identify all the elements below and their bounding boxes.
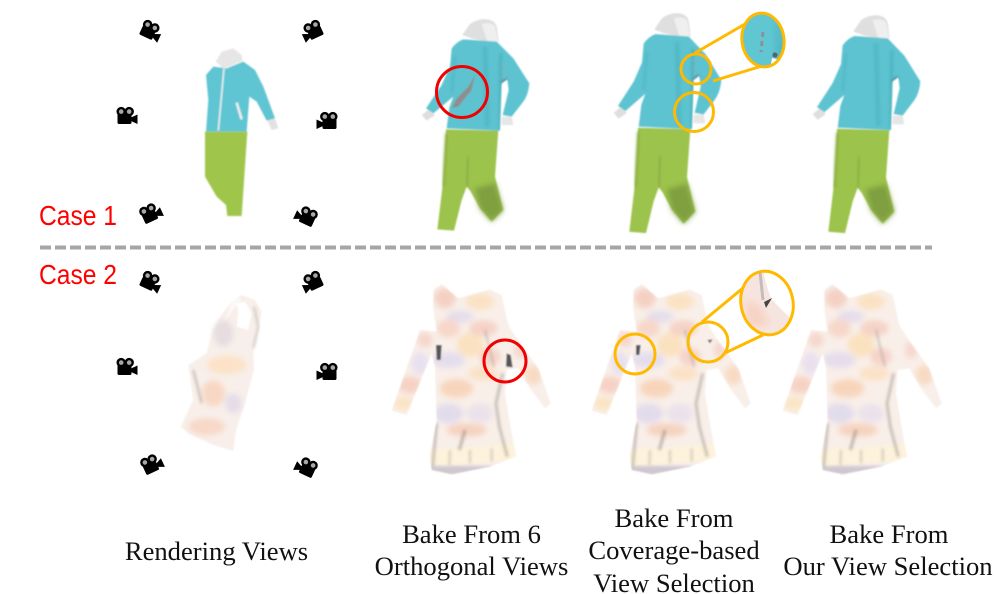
label: Case 1: Case 1 — [39, 200, 117, 231]
icons: six cameras, case 1 — [116, 18, 338, 228]
label: Case 2: Case 2 — [39, 259, 117, 290]
callout: red circle on artifact — [436, 66, 488, 118]
caption: Bake From 6 Orthogonal Views: Orthogonal Views — [375, 551, 568, 581]
panel: case 2 our view selection — [778, 280, 948, 480]
figure: baked person, coverage-based — [614, 13, 721, 233]
callout: red circle on artifact — [484, 340, 526, 382]
caption: Bake From Coverage-based View Selection: Coverage-based — [588, 535, 760, 565]
panel: case 2 coverage-based view selection — [587, 266, 799, 480]
caption: Bake From Our View Selection: Bake From — [830, 519, 949, 549]
panel: case 1 our view selection — [813, 15, 920, 233]
divider: dashed line between cases — [40, 246, 932, 250]
panel: case 1 bake from 6 orthogonal views — [422, 19, 529, 231]
caption: Bake From Coverage-based View Selection — [588, 503, 760, 594]
figure: front view clothed person, case 1 — [205, 48, 278, 216]
figure: side view dress — [181, 295, 262, 451]
figure: baked person, our selection — [813, 15, 920, 233]
caption: Rendering Views: Rendering Views — [125, 536, 308, 566]
callout: magnified artifact with connector lines — [674, 5, 795, 132]
panel: case 1 coverage-based view selection — [614, 5, 795, 233]
panel: case 1 rendering views — [116, 18, 338, 228]
panel: case 2 rendering views — [116, 269, 338, 479]
figure: baked dress with dark artifacts — [387, 280, 557, 480]
caption: Bake From Coverage-based View Selection: Bake From — [615, 503, 734, 533]
caption: Bake From Our View Selection: Our View Selection — [783, 551, 993, 581]
figure: baked dress, coverage-based — [587, 280, 757, 480]
caption: Bake From Our View Selection — [783, 519, 993, 581]
callout: magnified artifact with connector lines — [615, 266, 799, 374]
figure: baked person with gray artifact — [422, 19, 529, 231]
icons: six cameras, case 2 — [116, 269, 338, 479]
caption: Bake From 6 Orthogonal Views: Bake From 6 — [402, 519, 541, 549]
caption: Bake From 6 Orthogonal Views — [375, 519, 568, 581]
figure: baked dress, our selection — [778, 280, 948, 480]
panel: case 2 bake from 6 orthogonal views — [387, 280, 557, 480]
